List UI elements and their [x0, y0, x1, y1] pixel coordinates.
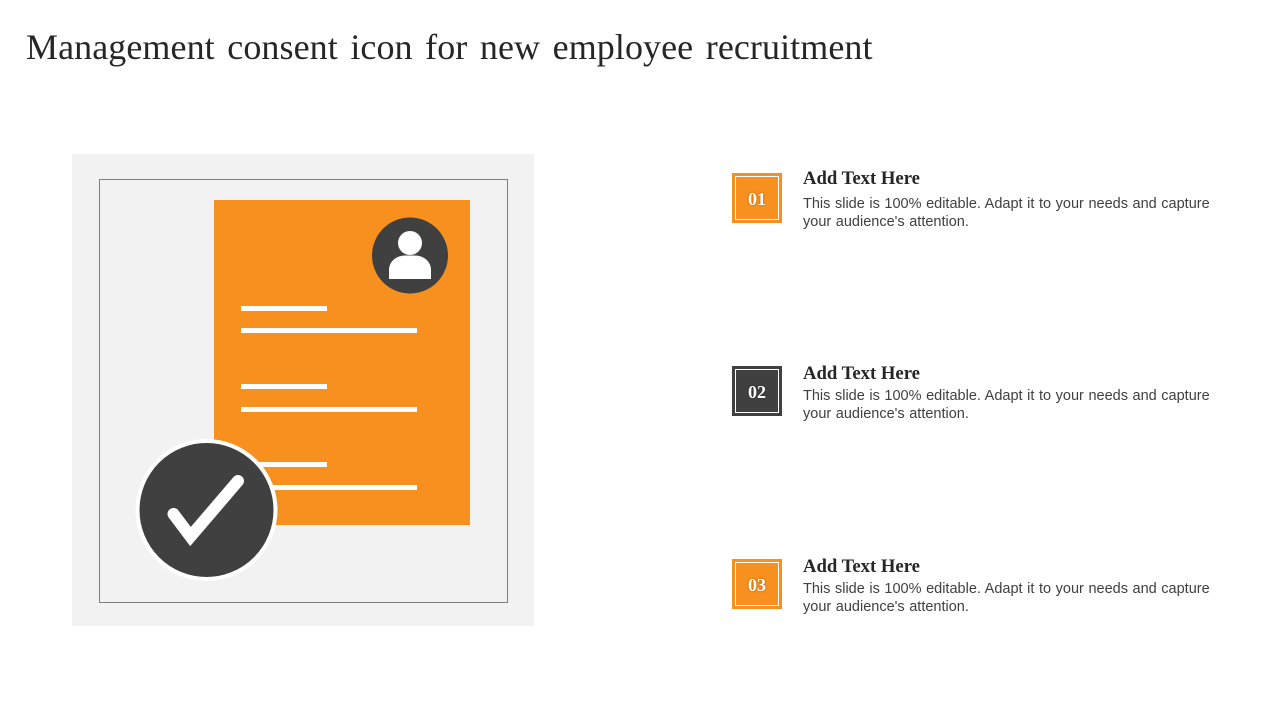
item description: This slide is 100% editable. Adapt it to your needs and capture your audience's attention.: [803, 388, 1210, 422]
item description: This slide is 100% editable. Adapt it to your needs and capture your audience's attention.: [803, 581, 1210, 615]
icon: check mark badge: [138, 441, 276, 579]
list item 02: [732, 363, 1210, 422]
item heading: Add Text Here: [803, 556, 920, 577]
document text lines: [241, 306, 417, 490]
number badge 01: [732, 173, 782, 223]
panel: document illustration: [72, 154, 534, 626]
panel background: [72, 154, 534, 626]
number badge 01: 01: [748, 189, 766, 209]
title: Management consent icon for new employee recruitment: [26, 27, 873, 67]
number badge 03: [732, 559, 782, 609]
number badge 03: 03: [748, 575, 766, 595]
number badge 02: [732, 366, 782, 416]
icon: person avatar: [372, 218, 448, 294]
list item 01: [732, 168, 1210, 230]
orange document: [214, 200, 470, 525]
number badge 02: 02: [748, 382, 766, 402]
item description: This slide is 100% editable. Adapt it to your needs and capture your audience's attention.: [803, 196, 1210, 230]
item heading: Add Text Here: [803, 168, 920, 189]
list item 03: [732, 556, 1210, 615]
panel inner frame: [100, 180, 508, 602]
item heading: Add Text Here: [803, 363, 920, 384]
